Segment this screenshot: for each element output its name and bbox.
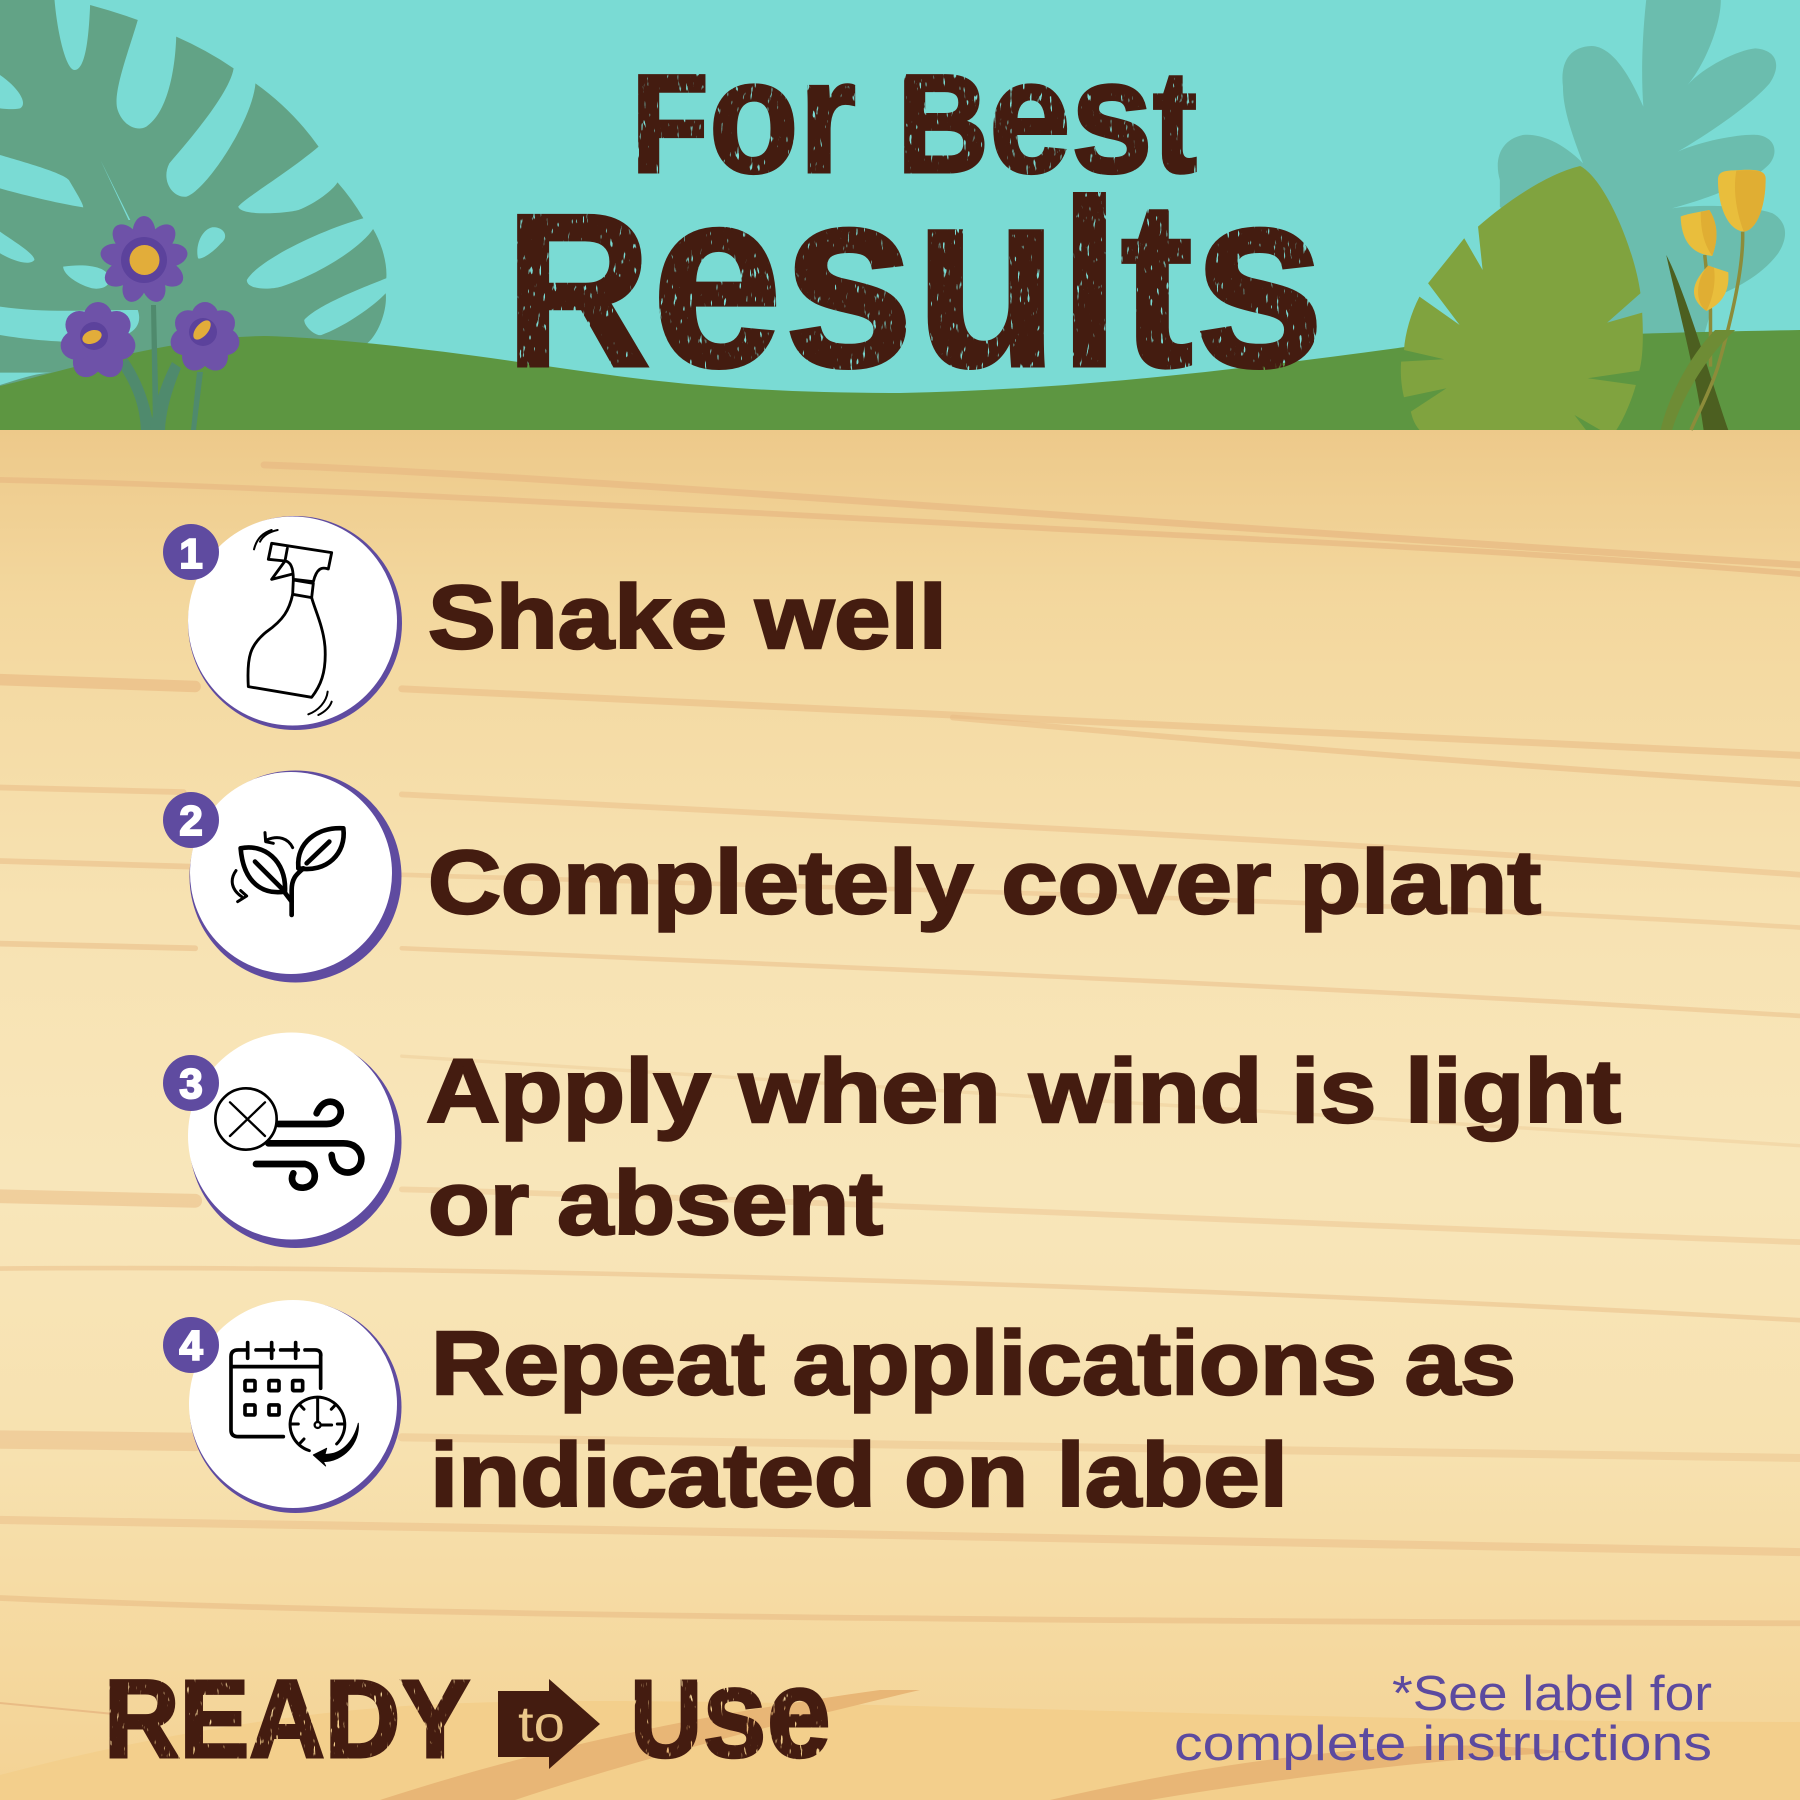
footnote: *See label for — [1392, 1667, 1712, 1721]
right banana leaf — [1401, 166, 1643, 430]
step 4: repeat applications as indicated on label — [163, 1300, 1516, 1526]
word: READY: READY — [104, 1658, 470, 1781]
purple flowers — [58, 216, 242, 430]
step 3: apply when wind is light or absent — [163, 1032, 1621, 1254]
text: apply when wind is light or absent: Apply when wind is light — [426, 1042, 1621, 1142]
text: apply when wind is light or absent — [426, 1042, 1621, 1254]
icon: crossed wind in circle — [188, 1032, 402, 1248]
text: shake well: Shake well — [428, 568, 947, 668]
footnote — [1174, 1667, 1712, 1771]
badge 2: 2 — [179, 797, 203, 844]
text: repeat applications as indicated on label: Repeat applications as — [431, 1314, 1516, 1414]
text: repeat applications as indicated on label — [430, 1314, 1516, 1526]
badge 3 — [163, 1055, 219, 1111]
badge 3: 3 — [179, 1060, 203, 1107]
title line: Results: Results — [505, 135, 1325, 421]
tulips — [1661, 170, 1766, 430]
arrow with to: to — [518, 1696, 565, 1752]
icon: calendar and clock in circle — [189, 1300, 402, 1513]
monstera leaf — [0, 0, 386, 400]
icon: plant leaves in circle — [190, 770, 402, 982]
text: repeat applications as indicated on label: indicated on label — [430, 1426, 1288, 1526]
badge 1 — [163, 524, 219, 580]
title — [505, 26, 1325, 421]
green hill — [0, 330, 1800, 430]
badge 4 — [163, 1317, 219, 1373]
panel: wood background — [0, 430, 1800, 1800]
footnote: complete instructions — [1174, 1717, 1712, 1771]
arrow with to — [498, 1679, 600, 1769]
title line: For Best: For Best — [631, 26, 1197, 207]
text: apply when wind is light or absent: or absent — [428, 1154, 883, 1254]
panel: sky and jungle header — [0, 0, 1800, 430]
sky — [0, 0, 1800, 430]
badge 2 — [163, 792, 219, 848]
step 1: shake well — [163, 516, 947, 730]
text: completely cover plant: Completely cover plant — [428, 833, 1541, 933]
badge 1: 1 — [179, 530, 203, 577]
back fern leaf — [1498, 0, 1785, 337]
badge 4: 4 — [179, 1322, 203, 1369]
icon: spray bottle in circle — [188, 516, 402, 730]
step 2: completely cover plant — [163, 770, 1541, 982]
ready to use logo — [104, 1642, 831, 1784]
word: Use: Use — [630, 1642, 831, 1784]
